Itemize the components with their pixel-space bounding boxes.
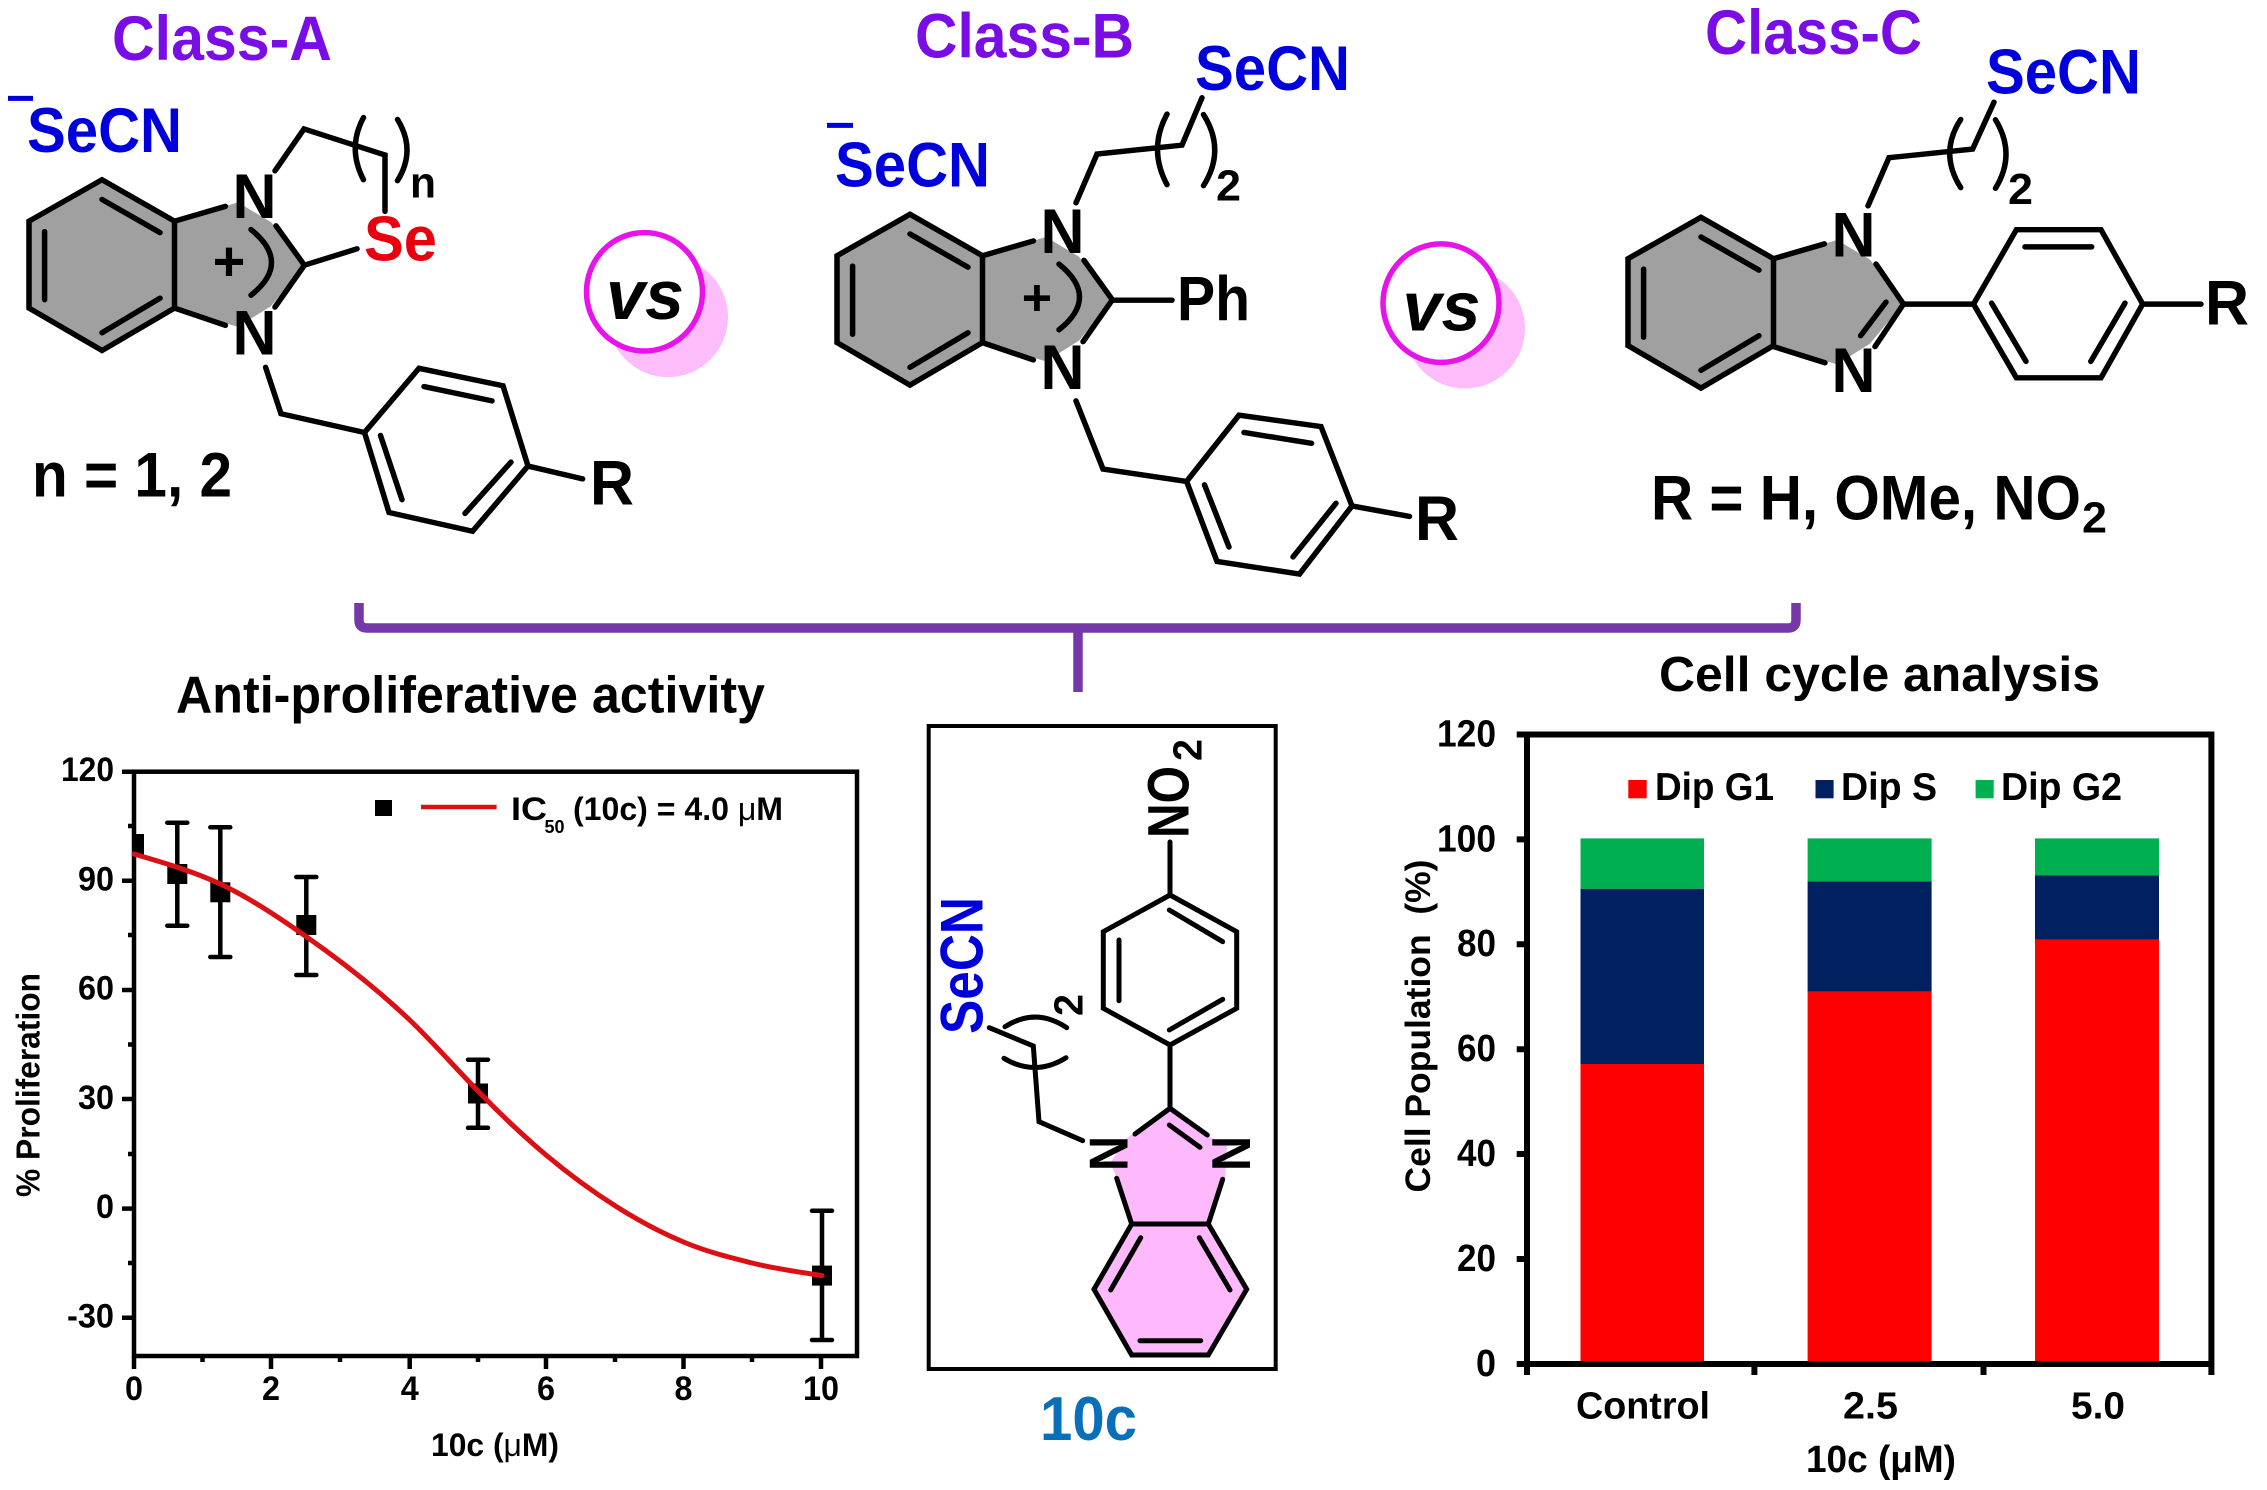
y axis tick labels: 100 bbox=[1437, 818, 1496, 860]
data points bbox=[134, 834, 832, 1286]
legend: IC50 bbox=[375, 791, 783, 837]
y axis tick labels: 40 bbox=[1457, 1133, 1496, 1175]
aryl ring with R: R bbox=[2205, 268, 2249, 338]
phenyl label: Ph bbox=[1177, 264, 1250, 334]
nitrogen labels bbox=[1078, 1136, 1262, 1171]
nitro group label: 2 bbox=[1165, 739, 1211, 761]
bar: 2.5 bbox=[1808, 838, 1932, 1362]
label: compound 10c: 10c bbox=[1040, 1385, 1137, 1454]
axes frame and ticks bbox=[1517, 734, 2211, 1375]
heading: Class-B: Class-B bbox=[915, 1, 1134, 71]
icon: vs badge right bbox=[1383, 244, 1525, 389]
legend: Dip G2 bbox=[2001, 766, 2122, 809]
nitrophenyl ring bbox=[1103, 842, 1237, 1108]
benzimidazolium core: N bbox=[232, 298, 276, 368]
axis title: 10c concentration: 10c (μM) bbox=[1806, 1439, 1956, 1481]
y axis tick labels bbox=[61, 751, 114, 1336]
SeCN side chain: 2 bbox=[2008, 165, 2033, 214]
benzimidazolium core: N bbox=[1040, 196, 1084, 267]
SeCN side chain: SeCN bbox=[928, 897, 995, 1034]
SeCN side chain: 2 bbox=[1216, 162, 1241, 210]
chart: stacked bars of cell population bbox=[1399, 714, 2211, 1481]
text: n = 1, 2: n = 1, 2 bbox=[32, 440, 232, 511]
bar: control bbox=[1580, 838, 1704, 1362]
axis title: % Proliferation: % Proliferation bbox=[10, 973, 46, 1197]
panel: Class-B structure bbox=[827, 1, 1459, 574]
x axis tick labels: 6 bbox=[537, 1370, 555, 1408]
SeCN side chain bbox=[1868, 37, 2141, 214]
y axis tick labels: 60 bbox=[1457, 1028, 1496, 1070]
benzyl substituent with R: R bbox=[590, 448, 634, 518]
axis title: Cell Population: Cell Population (%) bbox=[1399, 860, 1438, 1192]
x axis tick labels: 8 bbox=[674, 1370, 692, 1408]
error bars bbox=[167, 823, 832, 1340]
x axis tick labels bbox=[125, 1370, 839, 1408]
fitted curve bbox=[134, 854, 822, 1276]
legend: IC50: (10c) = 4.0 μM bbox=[573, 791, 783, 827]
legend bbox=[1628, 766, 2122, 809]
axis title: 10c concentration: 10c (μM) bbox=[431, 1427, 559, 1463]
selenium ring chain: n bbox=[410, 159, 436, 207]
y axis tick labels: 20 bbox=[1457, 1238, 1496, 1280]
icon: vs badge right: vs bbox=[1402, 268, 1480, 345]
bar: 5.0 bbox=[2035, 838, 2159, 1362]
x axis tick labels: 4 bbox=[401, 1370, 419, 1408]
selenium ring chain: Se bbox=[364, 204, 437, 275]
y axis tick labels: 30 bbox=[78, 1079, 114, 1117]
heading: Class-A: Class-A bbox=[112, 4, 332, 74]
y axis tick labels: 90 bbox=[78, 860, 114, 898]
heading: anti-proliferative activity: Anti-proliferative activity bbox=[176, 667, 765, 725]
y axis tick labels: 120 bbox=[1437, 714, 1496, 756]
icon: vs badge left: vs bbox=[606, 256, 684, 334]
legend: IC50: 50 bbox=[544, 817, 565, 837]
aryl ring with R bbox=[1904, 230, 2249, 378]
benzimidazole core bbox=[1628, 200, 1904, 406]
x axis tick labels: 2 bbox=[262, 1370, 280, 1408]
panel: Class-C structure bbox=[1628, 0, 2249, 543]
y axis tick labels: 60 bbox=[78, 970, 114, 1008]
benzimidazolium core: N bbox=[1040, 332, 1084, 403]
chart: dose response curve bbox=[10, 751, 857, 1463]
nitrogen labels: N bbox=[1200, 1136, 1262, 1171]
x axis tick labels: 10 bbox=[803, 1370, 839, 1408]
benzimidazolium core: N bbox=[232, 162, 276, 232]
benzimidazole core: N bbox=[1831, 335, 1875, 406]
y axis tick labels: 0 bbox=[96, 1188, 114, 1226]
legend: Dip S bbox=[1841, 766, 1937, 809]
x axis category labels: 2.5 bbox=[1843, 1386, 1898, 1428]
x axis category labels: 5.0 bbox=[2071, 1386, 2125, 1428]
SeCN side chain bbox=[928, 897, 1091, 1141]
text: R substituents: 2 bbox=[2082, 494, 2107, 543]
benzimidazole bonds bbox=[1094, 1108, 1247, 1355]
y axis tick labels: 120 bbox=[61, 751, 114, 789]
legend: IC50: IC bbox=[511, 791, 547, 827]
SeCN side chain: SeCN bbox=[1195, 33, 1350, 104]
counter-ion: SeCN anion: SeCN bbox=[27, 95, 182, 166]
panel: compound 10c box bbox=[928, 726, 1276, 1369]
y axis tick labels: -30 bbox=[67, 1298, 114, 1336]
benzimidazolium core bbox=[29, 162, 304, 368]
y axis tick labels: 0 bbox=[1476, 1343, 1496, 1385]
counter-ion: SeCN anion: SeCN bbox=[835, 130, 990, 201]
SeCN side chain: 2 bbox=[1045, 994, 1091, 1016]
benzimidazolium core: + bbox=[1022, 268, 1052, 326]
nitro group label: NO bbox=[1137, 766, 1202, 838]
SeCN side chain: SeCN bbox=[1986, 37, 2141, 107]
benzimidazolium core: + bbox=[213, 231, 245, 292]
benzyl substituent with R bbox=[1076, 401, 1459, 574]
x axis tick labels: 0 bbox=[125, 1370, 143, 1408]
y axis tick labels: 80 bbox=[1457, 923, 1496, 965]
legend: Dip G1 bbox=[1655, 766, 1774, 809]
benzyl substituent with R: R bbox=[1415, 483, 1459, 554]
axes frame and ticks bbox=[122, 772, 857, 1369]
panel: Class-A structure bbox=[8, 4, 634, 531]
SeCN side chain bbox=[1076, 33, 1350, 210]
benzimidazole core: N bbox=[1831, 200, 1875, 271]
text: R substituents: R = H, OMe, NO bbox=[1651, 463, 2081, 533]
bracket connecting classes to 10c bbox=[359, 603, 1796, 692]
y axis tick labels bbox=[1437, 714, 1496, 1385]
selenium ring chain bbox=[275, 118, 437, 275]
benzyl substituent with R bbox=[266, 367, 634, 531]
x axis category labels bbox=[1576, 1386, 2125, 1428]
x axis category labels: Control bbox=[1576, 1386, 1710, 1428]
icon: vs badge left bbox=[586, 233, 728, 377]
nitrogen labels: N bbox=[1078, 1136, 1140, 1171]
phenyl label bbox=[1112, 264, 1250, 334]
benzimidazolium core bbox=[837, 196, 1112, 403]
pink heterocycle fill bbox=[1094, 1108, 1247, 1355]
heading: cell cycle analysis: Cell cycle analysis bbox=[1659, 648, 2100, 702]
